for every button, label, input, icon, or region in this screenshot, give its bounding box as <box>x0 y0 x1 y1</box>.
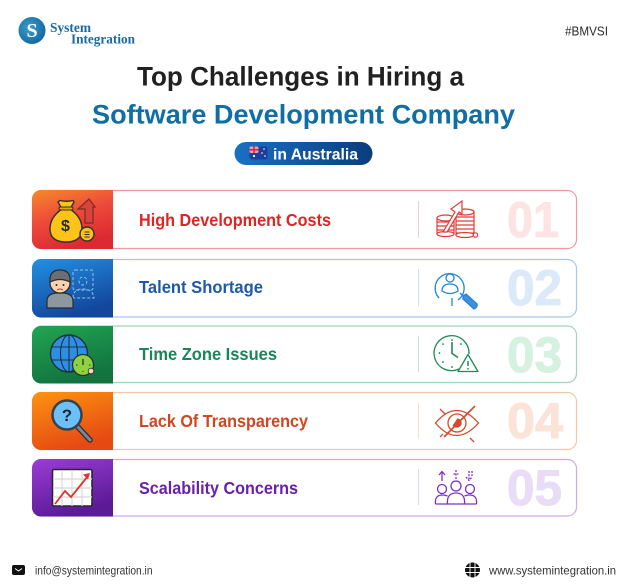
footer: website: www.systemintegration.in <box>488 564 616 578</box>
number: 01 <box>507 192 559 248</box>
icon: Australian flag <box>250 146 268 160</box>
icon: coin stacks with arrow <box>437 201 478 238</box>
badge: in Australia <box>234 142 372 165</box>
number: 02 <box>507 260 562 316</box>
icon: envelope <box>12 565 25 575</box>
icon: rising line chart <box>52 470 92 506</box>
icon: globe with clock <box>50 335 94 376</box>
hashtag: #BMVSI <box>565 24 608 38</box>
panel: Time Zone Issues <box>32 326 576 384</box>
number: 05 <box>507 460 562 516</box>
logo wordmark: Integration <box>71 32 135 48</box>
icon: money bag with rising arrow <box>50 199 95 242</box>
colour tab <box>32 392 113 450</box>
number: 04 <box>507 393 563 449</box>
icon: magnifier with question mark <box>52 400 90 440</box>
badge: in Australia: in Australia <box>273 146 358 164</box>
number: 03 <box>507 327 562 383</box>
label: Lack Of Transparency <box>139 411 308 431</box>
panel: High Development Costs <box>32 190 576 249</box>
logo wordmark <box>50 21 135 48</box>
icon: person with dashed vacancy <box>47 270 94 308</box>
panel: Lack Of Transparency <box>32 392 576 450</box>
colour tab <box>32 190 113 249</box>
title line 1: Top Challenges in Hiring a <box>137 62 465 92</box>
panel: Talent Shortage <box>32 259 576 318</box>
label: Time Zone Issues <box>139 344 277 364</box>
icon: magnifier over person <box>435 274 477 309</box>
icon: globe <box>465 562 480 578</box>
icon: money bag with rising arrow: $ <box>61 218 70 235</box>
colour tab <box>32 259 113 318</box>
title line 2: Software Development Company <box>92 100 515 130</box>
icon: magnifier with question mark: ? <box>62 406 72 425</box>
label: Scalability Concerns <box>139 478 298 498</box>
icon: three people with scaling arrows <box>435 470 477 504</box>
colour tab <box>32 459 113 516</box>
colour tab <box>32 326 113 384</box>
label: Talent Shortage <box>139 277 263 297</box>
logo: System Integration <box>18 17 135 48</box>
logo wordmark: System <box>50 21 91 36</box>
icon: clock with warning <box>434 336 478 372</box>
panel: Scalability Concerns <box>32 459 576 516</box>
icon: crossed-out eye <box>436 406 478 442</box>
footer: email: info@systemintegration.in <box>35 564 152 578</box>
icon: logo emblem: S <box>26 20 38 42</box>
label: High Development Costs <box>139 210 331 230</box>
